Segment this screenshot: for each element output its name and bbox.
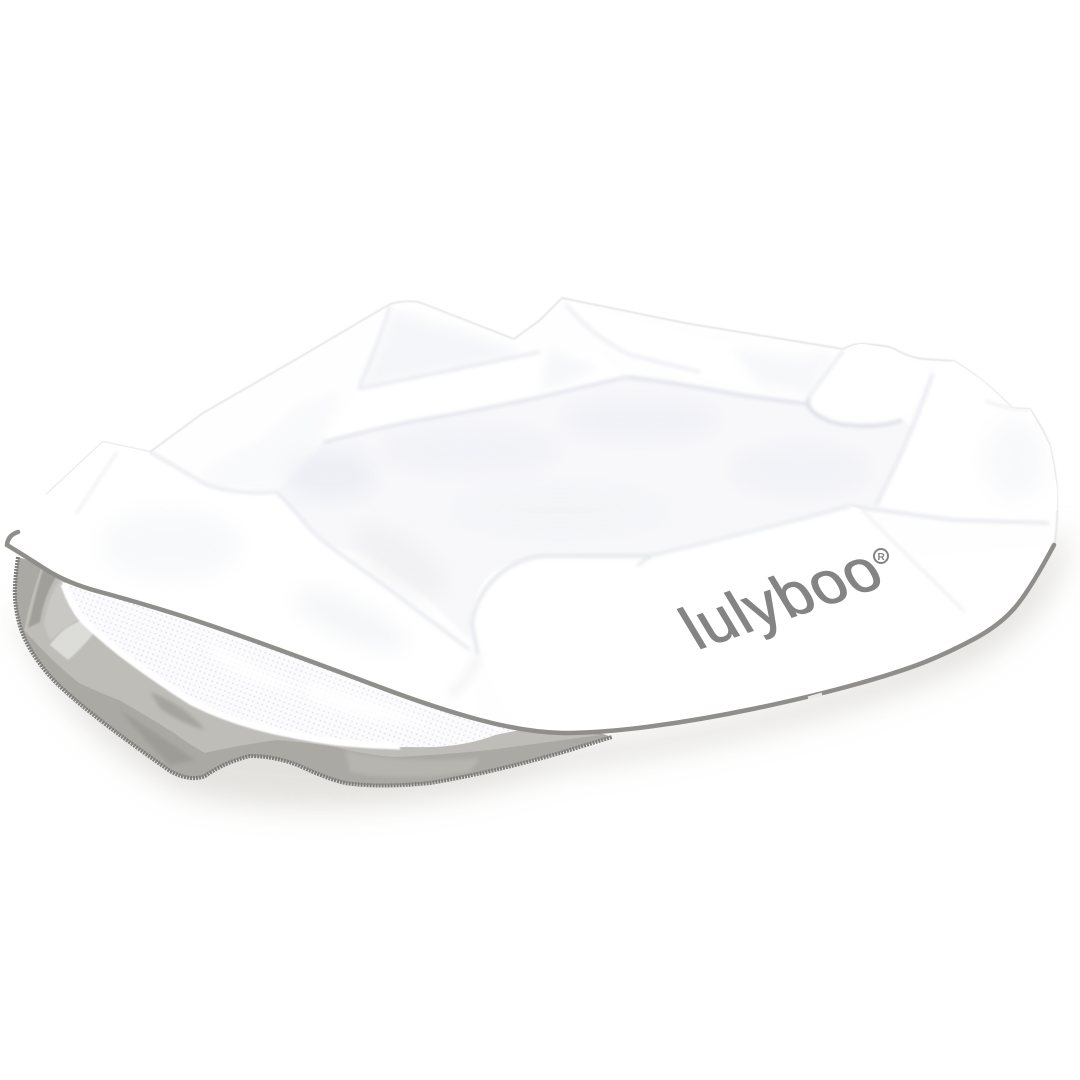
logo: lulyboo: lulyboo — [668, 536, 895, 662]
front left panel — [46, 442, 150, 496]
lower grey shell with zipper tape — [15, 557, 612, 786]
lining shade and highlights — [44, 578, 80, 640]
white mesh liner — [62, 582, 520, 747]
strap across top — [324, 352, 626, 442]
upper middle folds — [568, 302, 810, 395]
logo: lulyboo: R — [878, 552, 886, 563]
right lobe panel — [952, 361, 1057, 511]
white cover — [7, 298, 1060, 736]
fabric folds and shading — [46, 305, 1057, 656]
front flap with logo — [850, 506, 861, 510]
knitted zipper tape — [15, 557, 612, 786]
grey piping along cover edge — [7, 532, 1054, 733]
product photo: Lulyboo cover — [4, 297, 1072, 817]
ground shadow — [10, 530, 1068, 808]
grey satin lining — [24, 565, 600, 757]
knit texture patches — [120, 710, 195, 765]
cavity soft shadows — [296, 458, 364, 492]
gathered knot — [850, 344, 873, 348]
zipper teeth line — [15, 557, 612, 786]
inner cavity — [276, 377, 930, 640]
upper left inside fold — [374, 322, 492, 377]
faint silhouette rim — [46, 298, 1057, 545]
